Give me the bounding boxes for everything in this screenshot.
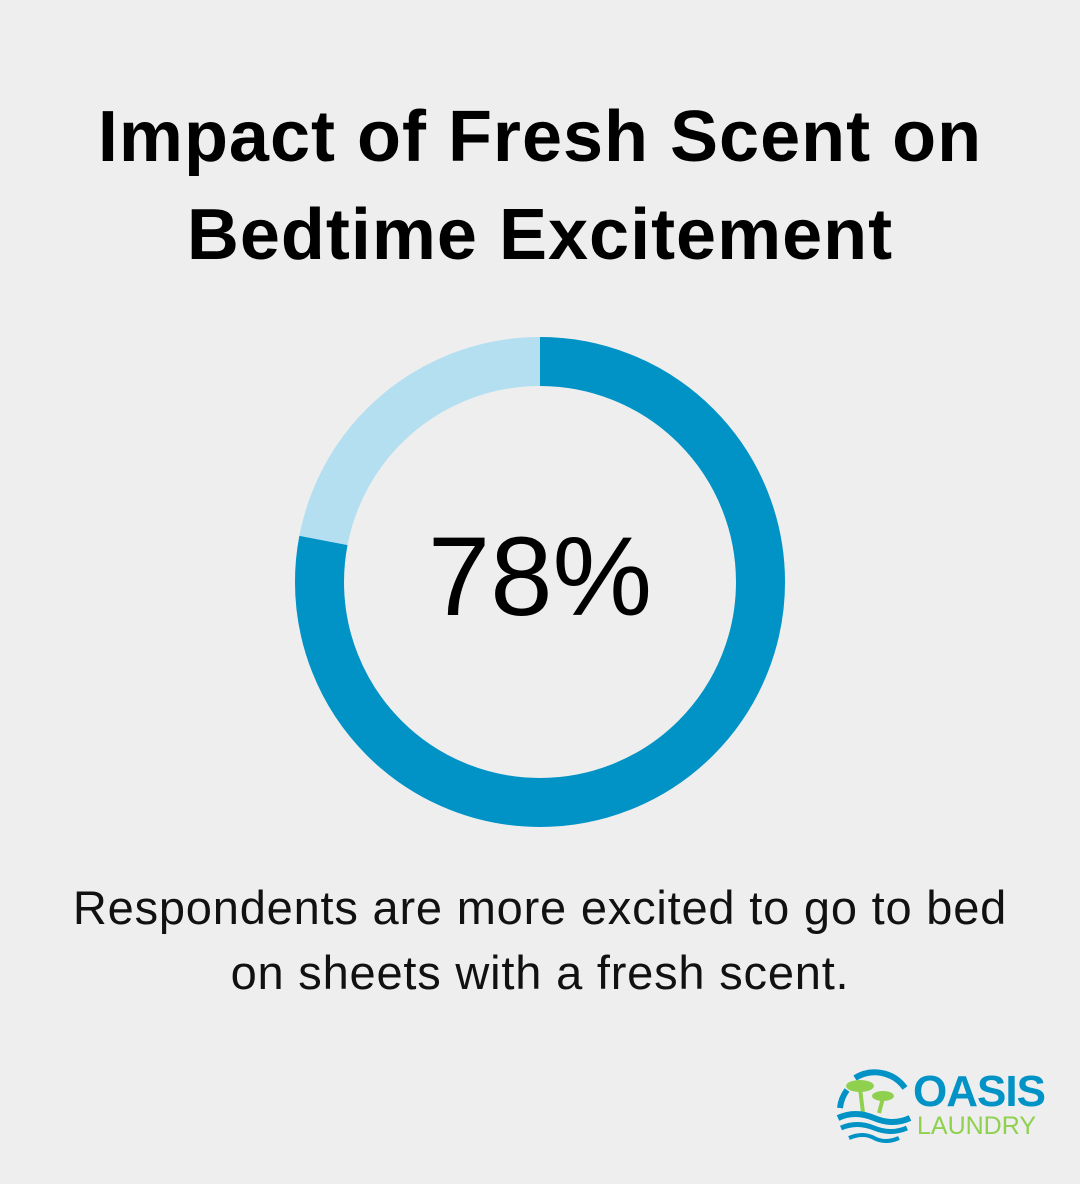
- title: Impact of Fresh Scent on: [98, 97, 982, 177]
- logo: OASIS: [913, 1067, 1045, 1116]
- logo: [836, 1067, 1045, 1143]
- title: Bedtime Excitement: [187, 195, 893, 275]
- description text: Respondents are more excited to go to bed: [73, 881, 1007, 934]
- donut chart: 78%: [428, 514, 652, 639]
- logo: LAUNDRY: [917, 1112, 1036, 1140]
- description text: on sheets with a fresh scent.: [231, 946, 849, 999]
- description text: [73, 881, 1007, 999]
- title: [98, 97, 982, 275]
